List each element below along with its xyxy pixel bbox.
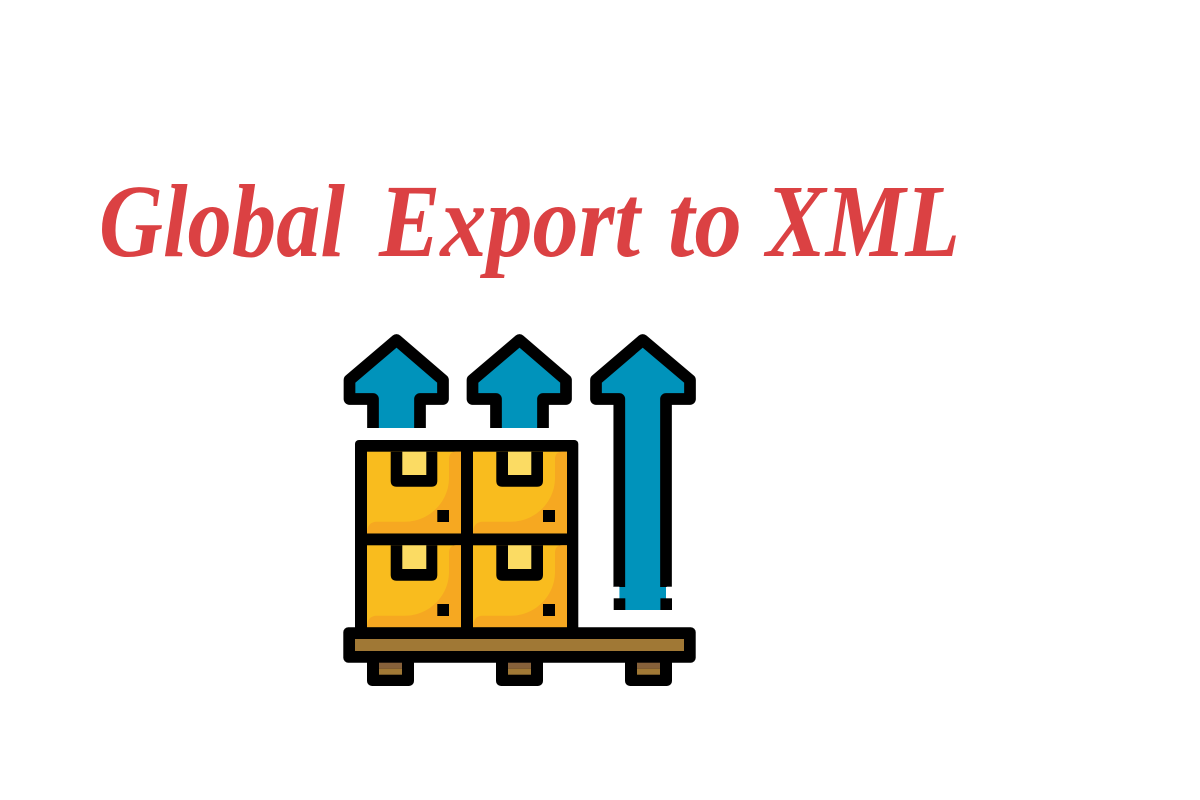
title: XML bbox=[763, 164, 960, 279]
icon: stacked boxes bbox=[355, 440, 578, 635]
icon: left up arrow bbox=[350, 340, 443, 428]
title: Global bbox=[99, 164, 345, 279]
box: top left bbox=[367, 452, 461, 533]
title: Export bbox=[378, 164, 643, 279]
icon: middle up arrow bbox=[472, 340, 566, 428]
icon: wooden pallet bbox=[343, 627, 696, 686]
box: top right bbox=[473, 452, 567, 533]
box: bottom left bbox=[367, 545, 461, 627]
icon: tall right up arrow bbox=[596, 340, 690, 610]
icon: pallet of boxes with export arrows bbox=[343, 340, 696, 686]
box: bottom right bbox=[473, 545, 567, 627]
title: to bbox=[668, 164, 742, 279]
